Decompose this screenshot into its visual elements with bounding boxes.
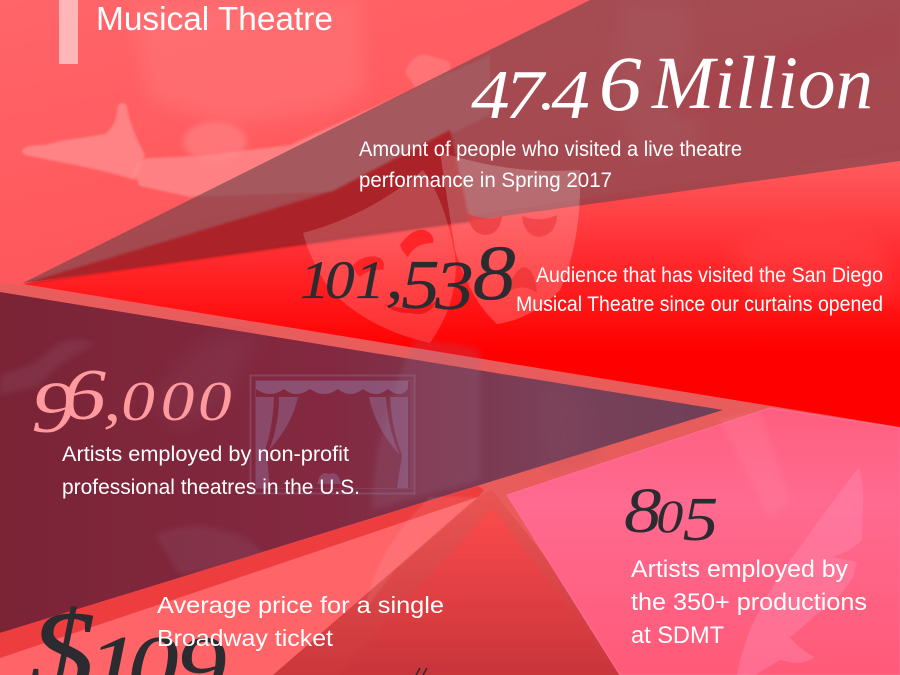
red band around bottom panel [273, 490, 640, 675]
coral base under lower panels [0, 283, 900, 675]
stat: 101,538 [300, 230, 883, 324]
stat: 47.46 Million: Million [651, 42, 873, 125]
stat: 101,538: 3 [434, 246, 474, 324]
icon: quill [737, 467, 863, 675]
stat: 47.46 Million: . [539, 56, 556, 122]
photo: audience hands in dark wedge [0, 335, 600, 575]
stat: 96,000: 0 [121, 371, 155, 433]
stat: 101,538: 8 [473, 230, 516, 316]
stat: 96,000 [31, 355, 360, 499]
stat: $109 [29, 588, 444, 675]
grey wedge: top statistic band [23, 0, 900, 283]
stat: 96,000: , [103, 367, 121, 434]
title: Musical Theatre [96, 0, 333, 37]
stat: $109: Broadway ticket [157, 625, 334, 651]
dark wedge panel: 96,000 [0, 292, 723, 633]
stat: 47.46 Million: performance in Spring 2017 [359, 168, 612, 192]
stat: 101,538: 0 [325, 250, 355, 310]
stat: 805: 0 [656, 490, 683, 542]
red wedge [23, 150, 900, 427]
stat: 47.46 Million: 4 [551, 55, 590, 133]
red glow shapes [730, 227, 900, 300]
bright band under dark wedge [0, 486, 484, 658]
stat: 101,538: 1 [355, 250, 385, 310]
stat: 805: 8 [624, 475, 661, 547]
stat: 47.46 Million [359, 41, 873, 192]
stat: 101,538: 5 [401, 245, 440, 323]
light panel: ticket price [0, 497, 478, 675]
red panel: bottom centre [339, 508, 620, 675]
stat: 96,000: 0 [161, 371, 194, 433]
cut-off dark marks at bottom edge [416, 668, 427, 675]
photo: performer silhouette [22, 0, 490, 197]
stat: 96,000: 0 [198, 371, 232, 433]
icon: tragedy mask [440, 152, 580, 324]
stat: 805: 5 [683, 485, 718, 554]
pink panel: 805 [507, 408, 900, 675]
stat: 96,000: professional theatres in the U.S. [62, 475, 360, 499]
stat: 47.46 Million: 4 [471, 55, 510, 133]
icon: stage curtain [250, 376, 414, 494]
header accent bar [59, 0, 78, 64]
stat: 101,538: 1 [300, 250, 330, 310]
pale highlight stripes on pink panel [720, 412, 790, 520]
stat: 96,000: 6 [62, 355, 106, 435]
stat: 47.46 Million: 6 [599, 41, 642, 127]
stat: $109: Average price for a single [157, 592, 444, 618]
stat: 805: Artists employed by [631, 556, 848, 583]
stat: 47.46 Million: 7 [505, 55, 547, 133]
stat: 101,538: , [386, 241, 403, 312]
icon: comedy mask [303, 170, 456, 343]
stat: 805: at SDMT [631, 622, 724, 649]
skirt highlight across light panel [365, 497, 478, 610]
stat: 96,000: 9 [31, 368, 75, 448]
stat: 47.46 Million: Amount of people who visited a live theatre [359, 137, 742, 161]
darker wedge overlap [23, 0, 900, 284]
stat: 805 [624, 475, 867, 649]
stat: 96,000: Artists employed by non-profit [62, 442, 349, 466]
stat: 805: the 350+ productions [631, 589, 867, 616]
